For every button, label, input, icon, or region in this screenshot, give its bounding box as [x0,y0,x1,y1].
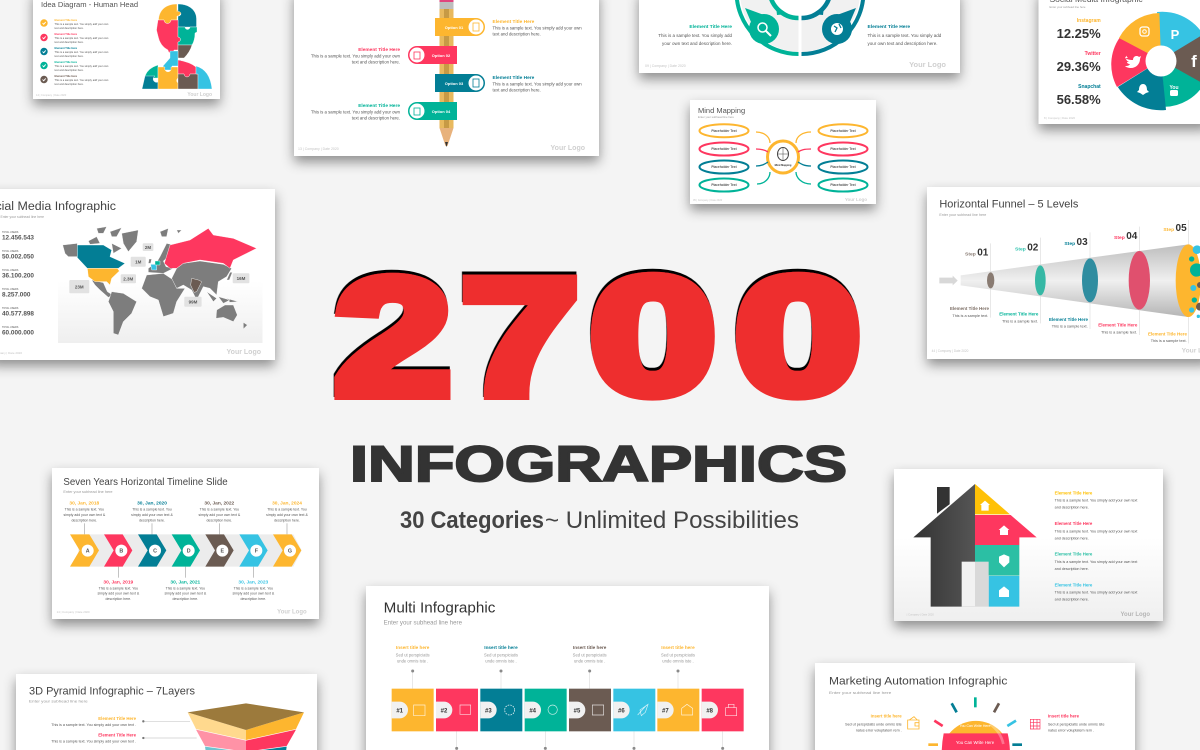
top captions: Sed ut perspiciatis [396,652,430,657]
top captions: unde omnis iste . [662,659,694,664]
option 02 [408,46,457,64]
heading: timeline: Enter your subhead line here [63,490,113,494]
top captions: Sed ut perspiciatis [484,652,518,657]
check list [40,18,109,86]
top milestones: This is a sample text. You [200,508,239,512]
panel: pencil options [294,0,599,156]
footer: 13 | Company | Date 2020 [298,147,339,151]
icon: chart settings [1030,719,1040,729]
layer captions: This is a sample text. You simply add your own text . [51,740,136,744]
panel: mind mapping [690,100,876,204]
user totals: 60.000.000 [2,330,34,336]
tile #3 [480,689,522,731]
connector lines [142,720,197,739]
option descriptions: This is a sample text. You simply add your own [311,54,401,58]
house descriptions: Element Title Here [1055,490,1093,495]
semicircle chart: You Can Write Here [956,740,995,745]
check list: Element Title Here [54,46,78,50]
option descriptions: This is a sample text. You simply add your own [311,110,401,114]
option descriptions: text and description here. [352,60,400,64]
central brain node [768,141,798,173]
top milestones: This is a sample text. You [267,508,307,512]
footer: | Company | Date 2020 [907,612,934,616]
option descriptions: text and description here. [352,116,400,120]
house descriptions: This is a sample text. You simply add your own text [1055,560,1137,564]
step labels: Step 01 [965,248,989,259]
left description: Element Title Here [689,24,732,30]
puzzle head figure [142,4,212,89]
footer: 14 | Company | Date 2020 [36,93,67,97]
step lines [991,220,1188,343]
tile #5: #5 [574,708,581,714]
icon: pinterest: P [1171,27,1180,42]
panel: seven years timeline [52,468,319,619]
option descriptions: This is a sample text. You simply add your own [492,26,582,30]
heading: funnel: Horizontal Funnel – 5 Levels [939,198,1078,210]
footer: Your Logo [909,60,946,69]
bottom milestones: simply add your own text & [98,592,140,596]
right caption: Insert title here [1048,713,1080,718]
house descriptions: This is a sample text. You simply add your own text [1055,499,1137,503]
tagline: 30 Categories [400,507,544,534]
option descriptions: text and description here. [492,88,541,92]
footer: Your Logo [277,610,307,616]
step labels: Step 04 [1114,231,1138,242]
heading: timeline [63,477,228,494]
heading: social media: Enter your subhead line here [1050,5,1086,9]
house descriptions: This is a sample text. You simply add your own text [1055,529,1137,533]
tile #2: #2 [441,708,448,714]
option 04 [408,102,457,120]
step letters [82,545,296,557]
stat figures: Snapchat [1078,84,1101,90]
icon: snapchat [1137,84,1149,95]
stat figures [1057,18,1101,107]
map callouts: 99M [189,300,198,304]
check list: text and description here. [54,40,84,44]
panel: idea diagram human head [33,0,220,99]
map callouts: 23M [75,284,84,290]
top milestones: description here. [71,519,97,523]
map callouts: 16M [237,276,246,281]
house illustration [913,484,1037,607]
footer: 44 | Company | Date 2020 [932,349,969,353]
user totals: 36.100.200 [2,272,34,280]
right caption: natus error voluptatem rem . [1048,728,1094,732]
top milestones: simply add your own text & [64,513,106,517]
option 01: Option 01 [445,25,464,30]
map callouts: 1M [135,259,142,264]
panel: social media pie [1038,0,1200,124]
step letters: G [288,549,292,555]
right nodes: Placeholder Text [830,165,857,169]
user totals: TOTAL USERS [2,269,19,272]
step letters: B [119,549,123,555]
step letters: F [255,549,259,555]
heading: funnel [939,198,1078,217]
user totals: TOTAL USERS [2,250,19,253]
user totals: 50.002.050 [2,254,34,260]
top milestones: 30, Jan, 2024 [272,501,302,507]
top milestones: description here. [274,519,300,523]
footer [57,610,307,616]
right nodes: Placeholder Text [830,183,857,187]
bottom milestones: 30, Jan, 2019 [103,579,134,585]
bottom milestones: This is a sample text. You [234,586,273,590]
panel: social media world map [0,189,275,360]
check list: This is a sample text. You simply add your own [54,78,109,82]
tile #8: #8 [706,708,714,714]
left caption [845,713,902,732]
footer: 09 | Company | Date 2020 [645,64,686,68]
bottom milestones: simply add your own text & [233,592,275,596]
footer [645,60,946,69]
map callouts [69,243,249,307]
user totals [2,231,34,336]
output dots [1189,245,1200,318]
pyramid layers [188,703,304,750]
option descriptions: text and description here. [492,32,541,36]
icon: wallet [908,717,919,729]
top captions: Insert title here [573,645,607,650]
footer [932,348,1200,355]
option 03 [435,74,485,92]
tile #6 [613,689,655,731]
timeline chevrons [70,534,301,567]
layer captions: This is a sample text. You simply add your own text . [51,723,136,727]
footer: Your Logo [845,197,867,202]
top milestones: This is a sample text. You [132,508,172,512]
panel: circular diagram [639,0,960,73]
footer [693,197,867,202]
sun rays [928,697,1022,745]
footer: Your Logo [227,349,261,356]
check list: text and description here. [54,54,84,58]
step descriptions: Element Title Here [950,306,990,311]
right description [868,24,942,46]
top milestones: simply add your own text & [266,513,308,517]
step descriptions: Element Title Here [1148,331,1188,336]
option 02: Option 02 [432,53,451,58]
top milestones: 30, Jan, 2018 [69,501,100,507]
top captions: Sed ut perspiciatis [661,652,695,657]
heading: multi: Multi Infographic [384,600,496,617]
footer [907,612,1150,618]
icon: twitter [1125,55,1141,68]
pie chart [1111,12,1200,110]
tile #7 [657,689,699,731]
top milestones: 30, Jan, 2020 [137,501,167,507]
tagline: ~ Unlimited Possibilities [545,507,799,534]
right description: This is a sample text. You simply add [868,33,942,38]
option descriptions: This is a sample text. You simply add your own [492,82,582,86]
panel: multi infographic [366,586,769,750]
step letters: D [187,549,191,555]
heading: pyramid: Enter your subhead line here [29,700,88,704]
right nodes: Placeholder Text [830,147,857,151]
check list: text and description here. [54,26,84,30]
heading: multi [384,600,496,626]
left nodes: Placeholder Text [711,183,738,187]
central brain node: Mind Mapping [775,164,792,167]
heading: world map: Enter your subhead line here [0,215,44,219]
tile #1 [392,689,434,731]
bottom milestones: This is a sample text. You [166,586,205,590]
footer [298,145,585,152]
map callouts: 2M [145,245,151,250]
heading: pyramid: 3D Pyramid Infographic – 7Layers [29,685,195,697]
footer: 14 | Company | Date 2020 [57,610,90,614]
right caption [1048,713,1104,732]
house descriptions: Element Title Here [1055,521,1093,526]
stems and dots [411,669,724,750]
top captions: Insert title here [484,645,518,650]
heading: mind mapping: Mind Mapping [698,106,745,115]
check list: Element Title Here [54,32,78,36]
step descriptions: This is a sample text. [1151,339,1187,343]
semicircle chart [942,721,1010,750]
icon: facebook: f [1191,52,1197,71]
left description [658,24,732,46]
layer captions: Element Title Here [98,733,137,738]
heading: marketing [829,676,1008,695]
right description: your own text and description here. [868,41,938,46]
house descriptions: and description here. [1055,506,1089,510]
top milestones: description here. [139,519,165,523]
heading: pyramid [29,685,195,704]
user totals: TOTAL USERS [2,231,19,234]
step descriptions: Element Title Here [999,312,1039,317]
main number 2700: 2 [335,244,451,429]
option 04: Option 04 [432,109,451,114]
top captions: unde omnis iste . [574,659,605,664]
map callouts: 2.3M [123,276,134,282]
left description: This is a sample text. You simply add [658,33,732,38]
check list: Element Title Here [54,18,78,22]
circle chart [736,0,863,56]
world map [63,227,257,335]
heading: mind mapping [698,106,745,119]
left nodes: Placeholder Text [711,129,738,133]
icons: house tiles [980,501,1009,597]
footer: Your Logo [187,92,212,98]
left caption: Insert title here [871,713,902,718]
panel: marketing automation [815,663,1135,750]
step letters: C [153,549,157,555]
step descriptions: This is a sample text. [952,314,988,318]
stat figures: 56.58% [1057,92,1101,107]
panel: house diagram [894,469,1163,621]
tile #2 [436,689,478,731]
house descriptions: Element Title Here [1055,552,1093,557]
option 01 [435,18,485,36]
step labels: Step 02 [1015,242,1039,253]
right nodes [818,124,868,192]
footer [0,349,261,356]
check list: text and description here. [54,68,84,72]
tile #5 [569,689,611,731]
house descriptions: Element Title Here [1055,582,1093,587]
option descriptions: Element Title Here [358,47,400,53]
main word INFOGRAPHICS: INFOGRAPHICS [350,436,847,492]
right caption: Sed ut perspiciatis unde omnis iste [1048,723,1104,727]
footer: 8 | Company | Date 2020 [1044,116,1075,120]
layer captions [51,716,137,750]
heading: funnel: Enter your subhead line here [939,213,986,217]
tile #1: #1 [396,708,404,714]
option descriptions: Element Title Here [492,75,535,81]
heading: marketing: Marketing Automation Infographic [829,676,1008,688]
icon: instagram [1140,27,1149,36]
top milestones: This is a sample text. You [65,508,104,512]
user totals: 12.456.543 [2,234,34,242]
semicircle chart: You Can Write Here [960,724,990,728]
icon: globe [822,8,856,44]
heading: idea diagram: Idea Diagram - Human Head [41,0,138,9]
panel: horizontal funnel [927,187,1200,359]
pencil [440,0,454,147]
left nodes [700,124,748,192]
step descriptions: This is a sample text. [1052,325,1088,329]
main number 2700: 7 [461,245,579,430]
tile #4: #4 [529,708,537,714]
left caption: natus error voluptatem rem . [856,728,902,732]
user totals: 40.577.898 [2,310,34,318]
top milestones: description here. [206,519,232,523]
step labels: Step 03 [1064,237,1088,248]
top milestones: simply add your own text & [131,513,173,517]
step descriptions [950,306,1188,343]
house descriptions: This is a sample text. You simply add your own text [1055,591,1137,595]
bottom milestones: This is a sample text. You [99,586,138,590]
left caption: Sed ut perspiciatis unde omnis iste [845,723,902,727]
user totals: 8.257.000 [2,292,31,298]
check list: Element Title Here [54,60,78,64]
option 03: Option 03 [445,81,464,86]
tile #4 [525,689,567,731]
footer: 05 | Company | Date 2020 [693,199,723,202]
tagline [400,507,799,534]
user totals: TOTAL USERS [2,288,19,291]
main number 2700: 0 [735,244,861,428]
house descriptions [1055,490,1137,602]
tile #3: #3 [485,708,492,714]
top captions: unde omnis iste . [485,659,517,664]
icon: youtube: You [1169,85,1179,91]
heading: marketing: Enter your subhead line here [829,690,892,695]
house descriptions: and description here. [1055,536,1089,540]
stat figures: Twitter [1085,51,1101,57]
layer captions: Element Title Here [98,716,137,721]
step labels [965,223,1187,259]
heading: social media [1050,0,1143,9]
step labels: Step 05 [1163,223,1187,234]
check list: This is a sample text. You simply add your own [54,64,109,68]
heading: mind mapping: Enter your subhead line here [698,115,734,119]
bottom milestones: 30, Jan, 2023 [238,579,269,585]
main number 2700: 0 [590,244,716,428]
bottom milestones: 30, Jan, 2021 [170,579,201,585]
top captions: unde omnis iste . [397,659,428,664]
funnel level ellipses [987,244,1200,317]
funnel cone [961,244,1188,317]
option descriptions: Element Title Here [492,19,535,25]
panel: 3d pyramid [16,674,317,750]
left nodes: Placeholder Text [711,165,738,169]
house descriptions: and description here. [1055,598,1089,602]
step letters: A [86,549,90,555]
step descriptions: This is a sample text. [1002,319,1038,323]
footer [36,92,212,98]
house descriptions: and description here. [1055,567,1089,571]
left nodes: Placeholder Text [711,147,738,151]
step letters: E [221,549,225,555]
stems [84,523,287,578]
top milestones: 30, Jan, 2022 [204,501,235,507]
check list: Element Title Here [54,74,78,78]
check list: This is a sample text. You simply add your own [54,22,109,26]
step descriptions: Element Title Here [1049,317,1089,322]
top captions: Insert title here [396,645,430,650]
top captions [396,645,695,664]
gray band [78,534,302,567]
bottom milestones: description here. [240,597,266,601]
user totals: TOTAL USERS [2,326,19,329]
heading: timeline: Seven Years Horizontal Timeline Slide [63,477,228,488]
footer: Your Logo [551,145,585,152]
right nodes: Placeholder Text [830,129,857,133]
icon: search [745,8,779,44]
step descriptions: Element Title Here [1098,323,1138,328]
map backdrop [58,230,262,343]
heading: multi: Enter your subhead line here [384,620,463,626]
step descriptions: This is a sample text. [1101,330,1137,334]
bottom milestones: description here. [172,597,198,601]
top milestones [64,501,308,523]
tile #6: #6 [618,708,625,714]
right description: Element Title Here [868,24,910,30]
curved arrows [756,132,811,184]
tile #8 [702,689,744,731]
arrow [939,276,958,285]
option descriptions [311,19,582,120]
stat figures: Instagram [1077,18,1101,24]
bottom milestones: description here. [105,597,131,601]
user totals: TOTAL USERS [2,307,19,310]
main number 2700 [335,244,861,430]
bottom milestones: simply add your own text & [165,592,207,596]
check list: This is a sample text. You simply add your own [54,36,109,40]
top captions: Sed ut perspiciatis [573,652,607,657]
tile #7: #7 [662,708,669,714]
check list: text and description here. [54,82,84,86]
check list: This is a sample text. You simply add your own [54,50,109,54]
stat figures: 12.25% [1057,26,1101,41]
top captions: Insert title here [661,645,695,650]
footer: Your Logo [1121,612,1150,618]
option descriptions: Element Title Here [358,103,400,109]
top milestones: simply add your own text & [199,513,241,517]
bottom milestones [98,579,275,601]
stat figures: 29.36% [1057,59,1101,74]
left description: your own text and description here. [662,41,732,46]
